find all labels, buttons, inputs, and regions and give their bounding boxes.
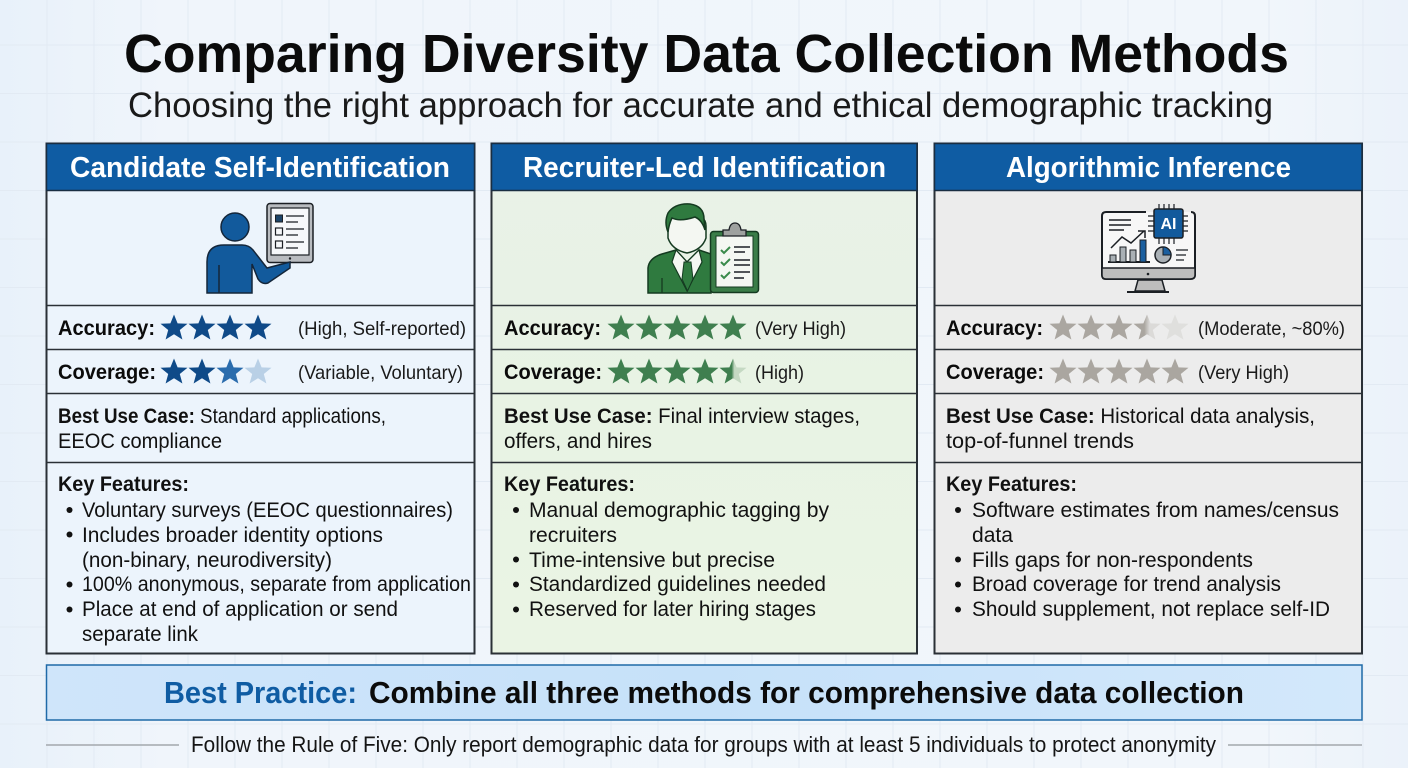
best practice banner — [46, 665, 1362, 720]
key features: Key Features: — [58, 473, 189, 496]
key features — [946, 473, 1339, 621]
key features: Voluntary surveys (EEOC questionnaires) — [82, 499, 453, 522]
best use case: top-of-funnel trends — [946, 430, 1134, 453]
key features: Fills gaps for non-respondents — [972, 549, 1253, 572]
best use case — [58, 405, 386, 453]
best use case: EEOC compliance — [58, 430, 222, 453]
icon: monitor with AI chip — [1102, 204, 1195, 292]
key features: Place at end of application or send — [82, 598, 398, 621]
coverage rating: (Variable, Voluntary) — [298, 362, 463, 384]
key features: separate link — [82, 623, 198, 646]
title: Comparing Diversity Data Collection Methods — [124, 24, 1289, 84]
panel: recruiter-led identification — [491, 144, 917, 654]
key features — [504, 473, 829, 621]
key features: 100% anonymous, separate from application — [82, 573, 471, 596]
key features: recruiters — [529, 524, 617, 547]
key features: Reserved for later hiring stages — [529, 598, 816, 621]
panel heading: candidate self-identification: Candidate Self-Identification — [70, 152, 450, 184]
panel heading: algorithmic inference: Algorithmic Inference — [1006, 152, 1291, 184]
icon: recruiter with clipboard — [648, 204, 758, 293]
accuracy rating — [504, 314, 846, 340]
best use case — [504, 405, 860, 453]
footer note: Follow the Rule of Five: Only report demographic data for groups with at least 5 individuals to protect anonymity — [191, 732, 1216, 757]
accuracy rating: (Very High) — [755, 318, 846, 340]
panel: algorithmic inference — [934, 144, 1362, 654]
best use case: Best Use Case: Standard applications, — [58, 405, 386, 428]
panel heading: recruiter-led identification — [492, 144, 917, 190]
best use case — [946, 405, 1315, 453]
key features: Time-intensive but precise — [529, 549, 775, 572]
best use case: Best Use Case: Final interview stages, — [504, 405, 860, 428]
accuracy rating: (High, Self-reported) — [298, 318, 466, 340]
coverage rating — [58, 358, 463, 384]
best use case: Best Use Case: Historical data analysis, — [946, 405, 1315, 428]
key features: Key Features: — [504, 473, 635, 496]
icon: person with tablet survey — [207, 204, 313, 293]
coverage rating: Coverage: — [946, 361, 1044, 384]
icon: monitor with AI chip: AI — [1160, 216, 1176, 233]
best practice banner: Combine all three methods for comprehensive data collection — [369, 675, 1244, 710]
coverage rating: (Very High) — [1198, 362, 1289, 384]
coverage rating: (High) — [755, 362, 804, 384]
panel: candidate self-identification — [46, 144, 474, 654]
key features: Broad coverage for trend analysis — [972, 573, 1281, 596]
subtitle: Choosing the right approach for accurate and ethical demographic tracking — [128, 86, 1273, 125]
accuracy rating: (Moderate, ~80%) — [1198, 318, 1345, 340]
coverage rating: Coverage: — [58, 361, 156, 384]
key features: Key Features: — [946, 473, 1077, 496]
panel heading: recruiter-led identification: Recruiter-Led Identification — [523, 152, 886, 184]
accuracy rating: Accuracy: — [504, 317, 601, 340]
panel heading: algorithmic inference — [934, 144, 1362, 190]
accuracy rating — [58, 314, 466, 340]
key features — [58, 473, 471, 646]
key features: Should supplement, not replace self-ID — [972, 598, 1330, 621]
best use case: offers, and hires — [504, 430, 652, 453]
key features: (non-binary, neurodiversity) — [82, 549, 332, 572]
key features: Software estimates from names/census — [972, 499, 1339, 522]
key features: Manual demographic tagging by — [529, 499, 829, 522]
key features: Includes broader identity options — [82, 524, 383, 547]
coverage rating — [504, 358, 804, 384]
panel heading: candidate self-identification — [46, 144, 474, 190]
accuracy rating: Accuracy: — [58, 317, 155, 340]
accuracy rating — [946, 314, 1345, 340]
key features: Standardized guidelines needed — [529, 573, 826, 596]
coverage rating: Coverage: — [504, 361, 602, 384]
coverage rating — [946, 358, 1289, 384]
best practice banner: Best Practice: — [164, 675, 357, 710]
key features: data — [972, 524, 1013, 547]
accuracy rating: Accuracy: — [946, 317, 1043, 340]
